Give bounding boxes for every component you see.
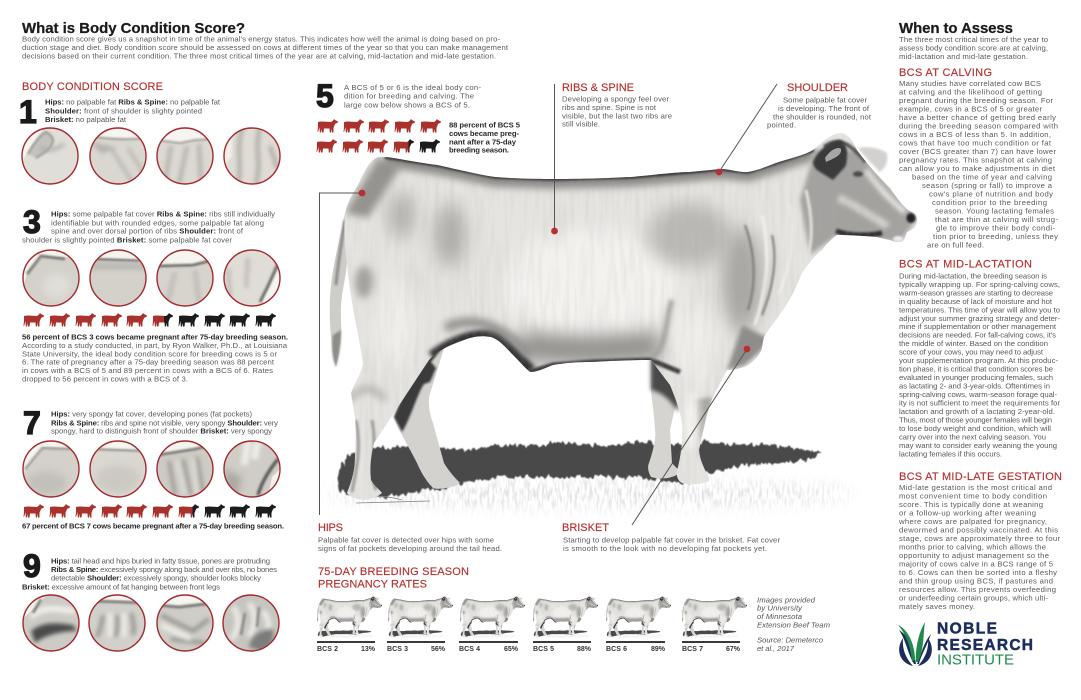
text: BCS at mid-late gestation: or a follow-up working after weaning (899, 508, 1036, 518)
small cow BCS 7: 67% (726, 646, 741, 653)
text: BCS at mid-lactation: adjust your summer grazing strategy and deter- (899, 314, 1060, 323)
heading: body condition score: BODY CONDITION SCORE (22, 81, 163, 93)
text: BCS at mid-lactation: evaluated in younger producing females, such (899, 373, 1053, 382)
text: shoulder: the shoulder is rounded, not (773, 112, 872, 121)
text: BCS at mid-late gestation: or underfeeding certain groups, which ulti- (899, 594, 1048, 602)
text: BCS at mid-lactation: decisions are needed. For fall-calving cows, it's (899, 331, 1056, 340)
description BCS 5: A BCS of 5 or 6 is the ideal body con- (344, 83, 481, 92)
intro: when to assess: The three most critical times of the year to (899, 35, 1048, 44)
text: BCS at calving: example, cows in a BCS of 5 or greater (899, 104, 1042, 114)
pregnancy icons 88 percent (316, 119, 441, 152)
description BCS 7: spongy, hard to distinguish front of shoulder Brisket: very spongy (51, 427, 272, 436)
image credit and source: of Minnesota (757, 612, 803, 621)
text: BCS at calving: season (spring or fall) to improve a (922, 181, 1053, 190)
caption BCS 5: breeding season. (449, 146, 509, 155)
photos BCS 9 (23, 595, 279, 651)
caption BCS 5: cows became preg- (449, 129, 519, 138)
block: BCS 9 (22, 548, 279, 651)
text: BCS at mid-lactation: Thus, most of those younger females will begin (899, 415, 1052, 424)
numeral 3: 3 (23, 204, 41, 240)
text: brisket (563, 536, 780, 553)
text: shoulder: pointed. (767, 121, 796, 130)
block: BCS 3 (22, 204, 288, 383)
text: BCS at mid-late gestation: and thin group using BCS, if pastures and (899, 576, 1053, 586)
numeral 1: 1 (19, 94, 37, 130)
leader line and dot (632, 346, 750, 525)
caption BCS 5 (449, 121, 521, 155)
description BCS 5: large cow below shows a BCS of 5. (344, 100, 470, 109)
text: BCS at calving: pregnancy rates. This snapshot at calving (899, 156, 1052, 164)
image credit and source: Source: Demeterco (757, 636, 824, 644)
callout: hips (318, 190, 502, 553)
text: BCS at calving: cows in a BCS of less than 5. In addition, (899, 130, 1051, 139)
photos BCS 1 (22, 128, 280, 184)
image credit and source: Extension Beef Team (757, 620, 831, 630)
intro text: Body condition score gives us a snapshot in time of the animal's energy status. This indicates how well the animal is doing based on pro- (22, 35, 500, 44)
heading: BCS at calving: BCS AT CALVING (899, 67, 992, 79)
intro text (22, 35, 509, 61)
small cow BCS 4 (459, 596, 526, 653)
text: study summary (22, 332, 288, 383)
text: BCS at mid-late gestation: mately saves money. (899, 602, 975, 611)
description BCS 9: Brisket: excessive amount of fat hanging between front legs (22, 582, 220, 591)
text: BCS at calving: cow's plane of nutrition and body (929, 190, 1053, 198)
text: hips (318, 536, 502, 553)
text: BCS at mid-lactation: During mid-lactation, the breeding season is (899, 271, 1047, 280)
small cow BCS 3 (387, 596, 454, 653)
text: BCS at mid-lactation: lactation and growth of a lactating 2-year-old. (899, 407, 1055, 416)
description BCS 3: Hips: some palpable fat cover Ribs & Spine: ribs still individually (51, 210, 275, 219)
text: hips: signs of fat pockets developing around the tail head. (318, 544, 502, 553)
description BCS 3 (22, 210, 275, 244)
panel: pregnancy rates (316, 566, 831, 653)
text: BCS at mid-late gestation: resources allow. This prevents overfeeding (899, 585, 1056, 594)
caption BCS 5: 88 percent of BCS 5 (449, 121, 521, 130)
text: BCS at calving: condition prior to the breeding (932, 198, 1047, 207)
text: BCS at mid-lactation: carry over into the next calving season. You (899, 432, 1046, 441)
description BCS 1: Hips: no palpable fat Ribs & Spine: no palpable fat (45, 98, 221, 107)
text: BCS at mid-lactation: your supplementation program. At this produc- (899, 356, 1058, 365)
heading: pregnancy rates: 75-DAY BREEDING SEASON (318, 566, 469, 578)
leader line and dot (716, 84, 777, 175)
panel: when to assess (898, 20, 1062, 668)
small cow BCS 2: 13% (361, 646, 376, 653)
small cow BCS 2: BCS 2 (317, 646, 338, 653)
text: study summary: State University, the ideal body condition score for breeding cows is 5 or (22, 349, 277, 358)
intro text: decisions based on their current condition. The three most critical times of the year are at calving, mid-lactation and mid-late gestation. (22, 52, 496, 61)
text: shoulder: Some palpable fat cover (783, 96, 867, 105)
intro text: duction stage and diet. Body condition score should be assessed on cows at different times of the year so that you can make management (22, 43, 509, 52)
heading: BCS at mid-late gestation: BCS AT MID-LATE GESTATION (899, 471, 1062, 483)
intro: when to assess: mid-lactation and mid-late gestation. (899, 52, 1028, 61)
heading: brisket: BRISKET (562, 522, 609, 534)
heading: BCS at mid-lactation: BCS AT MID-LACTATION (899, 258, 1032, 270)
text: ribs and spine (562, 95, 672, 129)
text: BCS at mid-lactation: ity is not sufficient to meet the requirements for (899, 398, 1060, 408)
small cow BCS 4: BCS 4 (459, 646, 480, 653)
numeral 5: 5 (316, 78, 334, 114)
text: BCS at mid-late gestation: majority of cows calve in a BCS range of 5 (899, 560, 1053, 568)
intro: when to assess: assess body condition score are at calving, (899, 44, 1048, 52)
leader line and dot (551, 84, 558, 234)
text: BCS at mid-late gestation: dewormed and possibly vaccinated. At this (899, 526, 1058, 534)
heading: pregnancy rates: PREGNANCY RATES (318, 579, 427, 591)
text: study summary: in cows with a BCS of 5 and 89 percent in cows with a BCS of 6. Rates (22, 366, 273, 375)
photos BCS 7 (23, 441, 280, 497)
description BCS 7: Hips: very spongy fat cover, developing pones (fat pockets) (51, 410, 252, 419)
caption BCS 7: 67 percent of BCS 7 cows became pregnant after a 75-day breeding season. (22, 522, 284, 531)
heading: pregnancy rates (318, 566, 469, 591)
small cow BCS 3: BCS 3 (387, 646, 408, 653)
text: BCS at mid-lactation: score of your cows, you may need to adjust (899, 348, 1044, 357)
small cow BCS 7 (681, 596, 748, 653)
image credit and source: by University (757, 604, 803, 613)
text: BCS at calving: cover (BCS greater than 7) can have lower (899, 147, 1056, 156)
callout: ribs and spine (551, 82, 672, 234)
text: BCS at mid-late gestation: score. This is typically done at weaning (899, 500, 1043, 509)
wordmark (937, 620, 1033, 668)
text: BCS at calving: season. Young lactating females (935, 206, 1054, 216)
wordmark: INSTITUTE (937, 652, 1014, 668)
text: BCS at mid-lactation: mine if supplementation or other management (899, 322, 1057, 331)
numeral 9: 9 (23, 548, 41, 584)
icon: grass leaves (898, 622, 932, 666)
block: BCS 1 (19, 94, 280, 184)
text: BCS at calving: during the breeding season compared with (899, 122, 1058, 130)
pregnancy icons 67 percent (24, 504, 276, 518)
small cow BCS 5: 88% (577, 646, 592, 653)
text: BCS at mid-lactation: lactating females if this occurs. (899, 449, 1002, 458)
logo: Noble Research Institute (898, 620, 1033, 668)
text: shoulder: is developing. The front of (778, 104, 870, 113)
description BCS 9 (22, 557, 277, 591)
text: BCS at calving: that are thin at calving will strug- (935, 215, 1058, 224)
pregnancy icons 56 percent (24, 313, 276, 326)
description BCS 5: dition for breeding and calving. The (344, 91, 474, 100)
text: BCS at calving: at calving and the likelihood of getting (899, 88, 1042, 96)
text: BCS at calving (899, 79, 1058, 250)
text: BCS at mid-lactation: the middle of winter. Based on the condition (899, 339, 1048, 348)
text: BCS at calving: Many studies have correlated cow BCS (899, 79, 1041, 88)
text: BCS at mid-late gestation: opportunity to adjust management so the (899, 551, 1049, 560)
photos BCS 3 (23, 250, 280, 306)
text: ribs and spine: visible, but the last two ribs are (562, 111, 672, 120)
text: ribs and spine: Developing a spongy feel over (562, 95, 669, 104)
block: BCS 7 (22, 405, 284, 531)
text: BCS at calving: cows that have too much condition or fat (899, 138, 1052, 148)
description BCS 9: Hips: tail head and hips buried in fatty tissue, pones are protruding (51, 557, 270, 566)
leader line and dot (320, 190, 365, 515)
small cow BCS 3: 56% (431, 646, 446, 653)
small cow BCS 6: 89% (651, 646, 666, 653)
text: BCS at calving: are on full feed. (927, 240, 984, 250)
text: BCS at mid-lactation: as lactating 2- and 3-year-olds. Oftentimes in (899, 382, 1050, 390)
text: study summary: According to a study conducted, in part, by Ryon Walker, Ph.D., at Louisiana (22, 341, 288, 350)
text: BCS at mid-late gestation: months prior to calving, which allows the (899, 542, 1046, 552)
description BCS 1: Brisket: no palpable fat (45, 115, 127, 124)
text: ribs and spine: still visible. (562, 120, 600, 129)
wordmark: NOBLE (937, 620, 997, 638)
wordmark: RESEARCH (937, 637, 1033, 654)
illustration: large cow BCS 5 (325, 130, 920, 509)
description BCS 1 (45, 98, 221, 124)
text: BCS at mid-late gestation: most convenient time to body condition (899, 492, 1047, 500)
text: shoulder (767, 96, 872, 130)
description BCS 9: detectable Shoulder: excessively spongy, shoulder looks blocky (51, 574, 261, 583)
text: brisket: Starting to develop palpable fat cover in the brisket. Fat cover (563, 536, 780, 545)
text: BCS at mid-late gestation: to 6. Cows can then be sorted into a fleshy (899, 568, 1057, 577)
text: study summary: 6. The rate of pregnancy after a 75-day breeding season was 88 percent (22, 358, 275, 367)
description BCS 3: spine and over dorsal portion of ribs Shoulder: front of (51, 227, 244, 236)
small cow BCS 6: BCS 6 (606, 646, 627, 653)
text: BCS at mid-lactation: tion phase, it is critical that condition scores be (899, 365, 1053, 374)
text: hips: Palpable fat cover is detected over hips with some (318, 536, 494, 545)
description BCS 3: shoulder is slightly pointed Brisket: some palpable fat cover (22, 235, 232, 244)
text: BCS at calving: based on the time of year and calving (912, 172, 1052, 182)
text: BCS at mid-lactation: may want to consider early weaning the young (899, 441, 1057, 450)
text: BCS at calving: have a better chance of getting bred early (899, 113, 1056, 122)
description BCS 3: identifiable but with rounded edges, some palpable fat along (51, 218, 264, 227)
small cow BCS 5: BCS 5 (533, 646, 554, 653)
panel: body condition score scale (19, 81, 288, 651)
text: BCS at mid-lactation: spring-calving cows, warm-season forage qual- (899, 390, 1057, 399)
small cow BCS 4: 65% (504, 646, 519, 653)
description BCS 1: Shoulder: front of shoulder is slighty pointed (45, 106, 202, 115)
text: BCS at mid-lactation: typically wrapping up. For spring-calving cows, (899, 280, 1060, 289)
text: study summary: 56 percent of BCS 3 cows became pregnant after 75-day breeding season. (22, 332, 288, 341)
text: study summary: dropped to 56 percent in cows with a BCS of 3. (22, 374, 188, 383)
text: BCS at mid-lactation: to lose body weight and condition, which will (899, 424, 1051, 433)
small cow BCS 2 (316, 596, 383, 653)
text: ribs and spine: ribs and spine. Spine is not (562, 103, 657, 112)
description BCS 7 (51, 410, 278, 436)
text: BCS at mid-late gestation: where cows are palpated for pregnancy, (898, 517, 1047, 526)
text: BCS at mid-lactation: temperatures. This time of year will allow you to (899, 305, 1060, 314)
small cow BCS 6 (605, 596, 672, 653)
image credit and source (757, 596, 831, 653)
description BCS 9: Ribs & Spine: excessively spongy along back and over ribs, no bones (51, 565, 277, 574)
image credit and source: Images provided (757, 596, 816, 604)
text: BCS at mid-lactation (898, 271, 1060, 458)
text: brisket: is smooth to the look with no developing fat pockets yet. (563, 544, 767, 553)
numeral 7: 7 (23, 405, 41, 441)
description BCS 5 (344, 83, 481, 109)
text: BCS at calving: pregnant during the breeding season. For (899, 96, 1053, 105)
text: BCS at calving: gle to improve their body condi- (936, 224, 1055, 232)
intro: when to assess (899, 35, 1048, 61)
text: BCS at mid-late gestation (898, 483, 1060, 611)
heading: hips: HIPS (318, 522, 343, 534)
caption BCS 5: nant after a 75-day (449, 137, 517, 146)
text: BCS at mid-late gestation: stage, cows are approximately three to four (899, 534, 1060, 543)
small cow BCS 7: BCS 7 (682, 646, 703, 653)
callout: brisket (562, 346, 780, 553)
description BCS 7: Ribs & Spine: ribs and spine not visible, very spongy Shoulder: very (51, 418, 278, 427)
text: BCS at calving: tion prior to breeding, unless they (933, 232, 1058, 241)
text: BCS at mid-lactation: in quality because of lack of moisture and hot (899, 297, 1053, 306)
image credit and source: et al., 2017 (757, 644, 795, 653)
block: BCS 5 (316, 78, 521, 155)
title: What is Body Condition Score? (22, 20, 245, 37)
heading: when to assess: When to Assess (899, 20, 1013, 37)
small cow BCS 5 (532, 596, 599, 653)
text: BCS at mid-late gestation: Mid-late gestation is the most critical and (899, 483, 1052, 492)
heading: ribs and spine: RIBS & SPINE (562, 82, 634, 94)
heading: shoulder: SHOULDER (787, 82, 848, 94)
text: BCS at calving: can allow you to make adjustments in diet (899, 164, 1056, 173)
callout: shoulder (716, 82, 872, 175)
text: BCS at mid-lactation: warm-season grasses are starting to decrease (898, 288, 1053, 297)
